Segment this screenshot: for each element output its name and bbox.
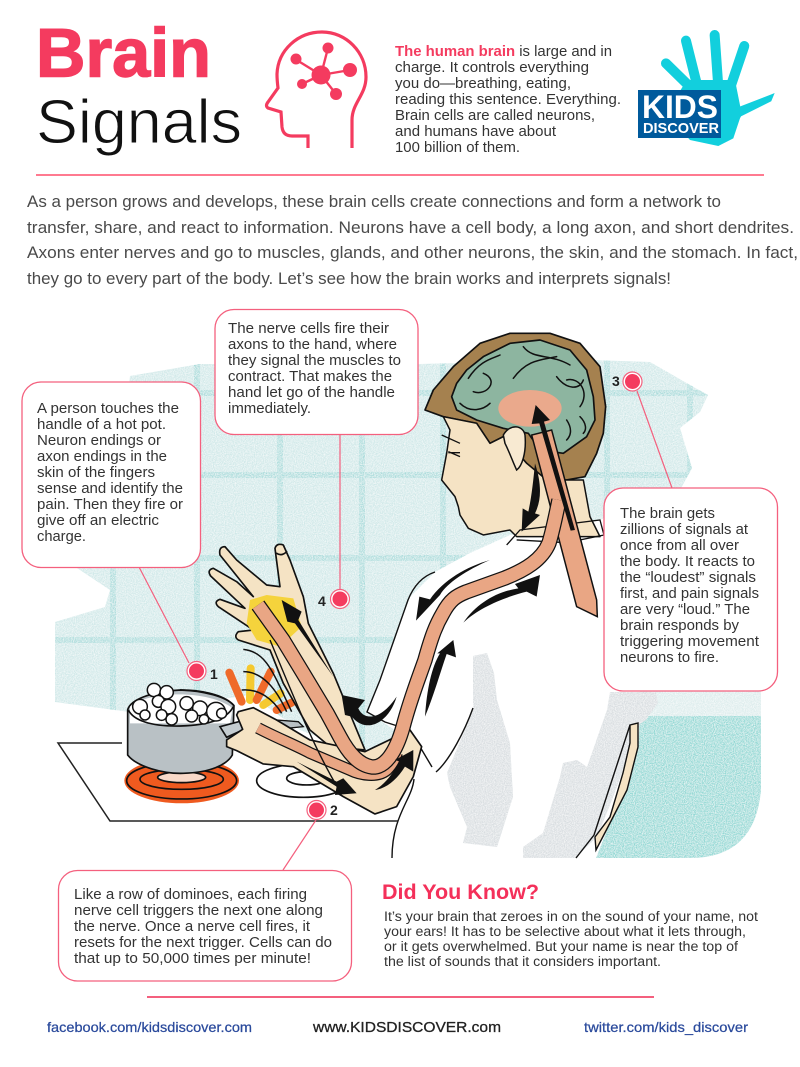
lower arm gripping handle <box>227 708 422 814</box>
intro blurb: 100 billion of them. <box>395 140 520 156</box>
counter top <box>58 743 398 821</box>
did you know text: It’s your brain that zeroes in on the sound of your name, not <box>384 909 758 924</box>
callout: step 2: Like a row of dominoes, each firing <box>74 887 307 903</box>
callout: step 1: sense and identify the <box>37 481 183 497</box>
callout: step 2: resets for the next trigger. Cells can do <box>74 935 332 951</box>
callout: step 3: first, and pain signals <box>620 586 759 602</box>
callout: step 1: axon endings in the <box>37 449 167 465</box>
callout: step 2: the nerve. Once a nerve cell fires, it <box>74 919 310 935</box>
raised arm and hand <box>209 544 365 750</box>
did you know text: your ears! It has to be selective about what it lets through, <box>384 924 746 939</box>
callout: step 3 <box>604 488 778 691</box>
callout: step 1: give off an electric <box>37 513 159 529</box>
marker 4: 4 <box>318 593 326 609</box>
pot of boiling water <box>128 683 303 773</box>
logo: Kids Discover <box>638 35 772 146</box>
callout: step 3: zillions of signals at <box>620 522 748 538</box>
intro blurb <box>395 44 621 156</box>
intro paragraph: Axons enter nerves and go to muscles, glands, and other neurons, the skin, and the stomach. In fact, <box>27 244 798 262</box>
did you know text: the list of sounds that it considers important. <box>384 954 661 969</box>
did you know text: or it gets overwhelmed. But your name is near the top of <box>384 939 738 954</box>
leader lines <box>139 391 672 870</box>
footer links: twitter.com/kids_discover <box>584 1019 748 1035</box>
callout: step 3: neurons to fire. <box>620 650 719 666</box>
intro blurb: charge. It controls everything <box>395 60 589 76</box>
callout: step 1: Neuron endings or <box>37 433 161 449</box>
did you know heading: Did You Know? <box>382 881 539 904</box>
intro paragraph <box>27 193 798 288</box>
callout: step 3: brain responds by <box>620 618 740 634</box>
callout: step 2 <box>58 870 352 981</box>
title <box>36 14 242 157</box>
marker 1: 1 <box>210 666 218 682</box>
footer links <box>47 1019 748 1036</box>
burner with rings <box>124 758 350 803</box>
callout: step 1 <box>22 382 200 568</box>
intro blurb: The human brain is large and in <box>395 44 612 60</box>
callout: step 4: immediately. <box>228 401 311 417</box>
intro paragraph: As a person grows and develops, these brain cells create connections and form a network to <box>27 193 721 211</box>
callout: step 4: axons to the hand, where <box>228 337 397 353</box>
callout: step 2: that up to 50,000 times per minute! <box>74 951 311 967</box>
callout: step 2: nerve cell triggers the next one along <box>74 903 323 919</box>
nerve paths through the arm <box>258 500 559 788</box>
marker 4 <box>318 590 350 609</box>
logo: Kids Discover: KIDS <box>642 89 718 125</box>
intro paragraph: they go to every part of the body. Let’s see how the brain works and interprets signals! <box>27 270 671 288</box>
callout: step 3: the “loudest” signals <box>620 570 756 586</box>
icon: head with neuron network <box>266 32 366 148</box>
illustration: person touching a hot pot <box>40 333 761 858</box>
callout: step 4: they signal the muscles to <box>228 353 401 369</box>
callout: step 1: pain. Then they fire or <box>37 497 183 513</box>
intro blurb: Brain cells are called neurons, <box>395 108 595 124</box>
marker 1 <box>187 662 218 682</box>
title: Signals <box>36 88 242 157</box>
callout: step 4: hand let go of the handle <box>228 385 395 401</box>
marker 2: 2 <box>330 802 338 818</box>
intro blurb: you do—breathing, eating, <box>395 76 571 92</box>
callout: step 1: A person touches the <box>37 401 179 417</box>
marker 3: 3 <box>612 373 620 389</box>
heat rays <box>229 649 292 713</box>
callout: step 3: triggering movement <box>620 634 759 650</box>
intro blurb: and humans have about <box>395 124 556 140</box>
footer links: facebook.com/kidsdiscover.com <box>47 1019 252 1035</box>
callout: step 1: charge. <box>37 529 86 545</box>
callout: step 1: handle of a hot pot. <box>37 417 166 433</box>
callout: step 4 <box>215 310 418 434</box>
intro paragraph: transfer, share, and react to information. Neurons have a cell body, a long axon, and short dendrites. <box>27 219 794 237</box>
marker 2 <box>307 800 338 820</box>
intro blurb: reading this sentence. Everything. <box>395 92 621 108</box>
shirt <box>367 500 761 858</box>
callout: step 4: contract. That makes the <box>228 369 392 385</box>
callout: step 4: The nerve cells fire their <box>228 321 389 337</box>
title: Brain <box>36 14 211 92</box>
callout: step 3: are very “loud.” The <box>620 602 750 618</box>
callout: step 3: once from all over <box>620 538 739 554</box>
marker 3 <box>612 372 642 391</box>
callout: step 1: skin of the fingers <box>37 465 155 481</box>
callout: step 3: the body. It reacts to <box>620 554 755 570</box>
did you know text <box>384 909 758 969</box>
signal arrows <box>282 405 575 795</box>
callout: step 3: The brain gets <box>620 506 715 522</box>
kitchen wall tiles <box>55 360 708 751</box>
head and brain <box>425 333 606 617</box>
logo: Kids Discover: DISCOVER <box>643 120 719 137</box>
footer links: www.KIDSDISCOVER.com <box>312 1019 501 1036</box>
